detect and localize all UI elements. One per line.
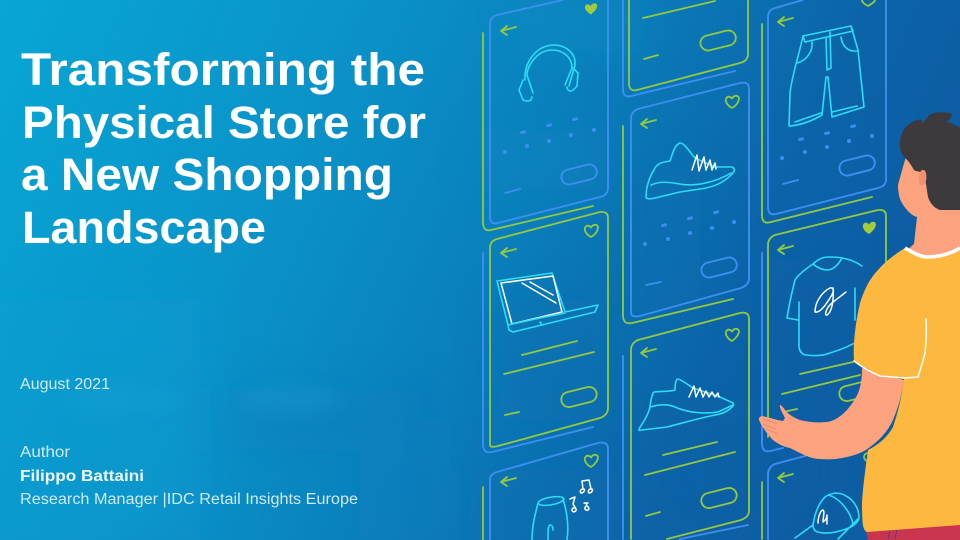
icon: cap (795, 493, 859, 539)
panel: shoe card (623, 83, 749, 323)
author block: Research Manager |IDC Retail Insights Europe (20, 491, 358, 508)
panel: t-shirt card (762, 210, 886, 451)
icon: shorts (789, 26, 864, 126)
arm and hand (759, 368, 904, 459)
icon: headphones (519, 45, 578, 101)
panel: shorts card (762, 0, 886, 223)
icon: t-shirt (787, 257, 862, 356)
t-shirt yellow (854, 248, 960, 532)
author block (20, 444, 358, 508)
ear (919, 170, 926, 185)
icon: music notes (570, 480, 592, 512)
panel: top middle card (623, 0, 748, 96)
icon: speaker (532, 495, 568, 540)
icon: low sneaker (639, 379, 734, 430)
title: a New Shopping (21, 149, 393, 200)
figure: shopper (759, 112, 960, 540)
panel: second sneaker card (623, 313, 749, 539)
panel: cap card (762, 453, 872, 539)
trousers (866, 522, 960, 540)
title: Landscape (22, 202, 266, 253)
panel: headphones card (483, 0, 608, 230)
icon: back arrow (501, 26, 516, 35)
icon: sneaker (646, 143, 734, 199)
date: August 2021 (20, 376, 110, 393)
sleeve edge (854, 319, 926, 378)
hair (900, 112, 960, 210)
title (21, 44, 426, 253)
title: Physical Store for (22, 97, 426, 148)
author block: Filippo Battaini (20, 468, 144, 485)
icon: laptop (497, 273, 598, 332)
icon: heart filled (585, 3, 597, 14)
author block: Author (20, 444, 70, 461)
title: Transforming the (21, 44, 425, 95)
neck and face (898, 130, 960, 262)
panel: speaker card (483, 443, 608, 540)
dots (503, 117, 596, 154)
collar (905, 248, 960, 257)
panel: laptop card (483, 212, 608, 452)
button (560, 163, 598, 186)
